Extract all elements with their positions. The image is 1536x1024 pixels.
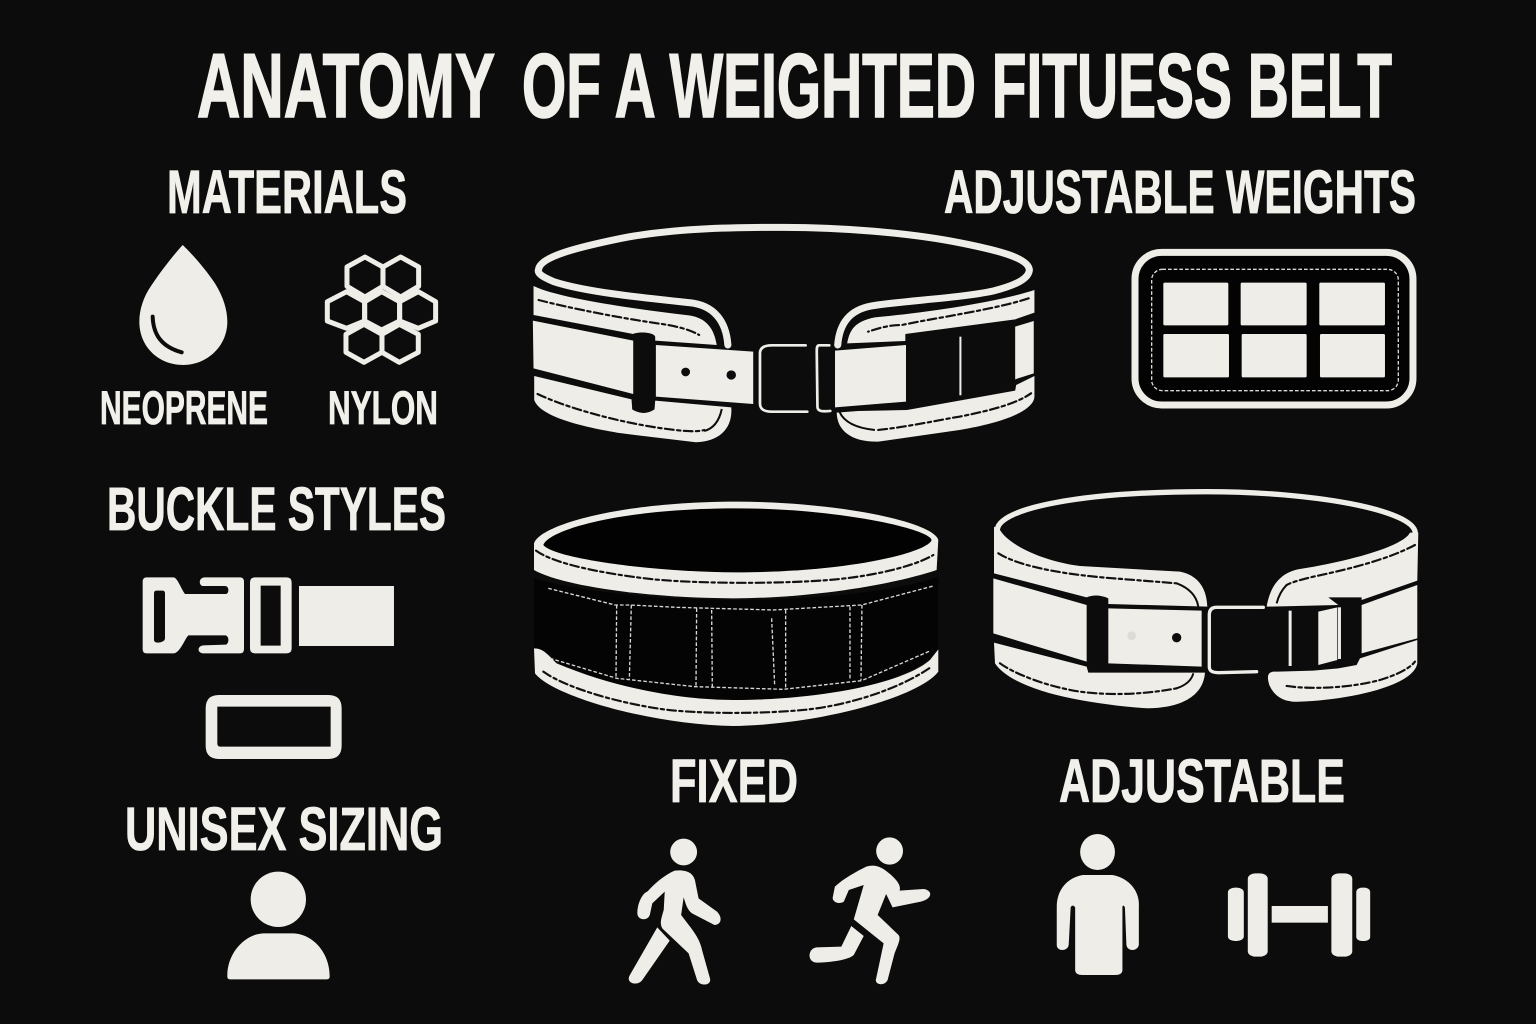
left upper strap xyxy=(534,286,717,345)
rim xyxy=(997,492,1415,533)
heading: materials: MATERIALS xyxy=(167,158,407,226)
right upper strap xyxy=(1267,533,1418,607)
illustration: open belt top xyxy=(533,227,1034,442)
right upper strap xyxy=(847,290,1034,343)
side-release clip xyxy=(143,577,244,653)
right lower strap xyxy=(837,376,1034,442)
upper rim xyxy=(534,502,938,598)
white stitching xyxy=(548,586,933,689)
slide ring xyxy=(250,577,292,653)
icon: buckle set xyxy=(143,577,394,759)
right mid band xyxy=(1362,585,1417,653)
tongue with hole xyxy=(1108,608,1202,667)
icon: neoprene drop xyxy=(139,245,227,365)
lower rim xyxy=(534,648,938,726)
heading: buckle styles: BUCKLE STYLES xyxy=(107,475,446,543)
outer frame xyxy=(1135,252,1413,405)
rim xyxy=(538,227,1029,345)
right tongue xyxy=(835,345,906,407)
slider and keeper xyxy=(1318,607,1337,665)
label: nylon: NYLON xyxy=(328,381,438,434)
buckle frame xyxy=(760,345,807,412)
label: adjustable: ADJUSTABLE xyxy=(1059,747,1345,815)
icon: unisex person xyxy=(227,872,330,979)
strap slit xyxy=(959,337,961,395)
right lower strap xyxy=(1268,640,1417,702)
icon: standing person xyxy=(1057,834,1139,975)
left upper strap xyxy=(994,527,1207,607)
illustration: adjustable belt xyxy=(993,492,1418,708)
stitching xyxy=(1152,269,1398,391)
weight cells xyxy=(1163,283,1385,377)
left lower strap xyxy=(994,643,1205,708)
left lower strap xyxy=(534,376,731,442)
title: ANATOMY xyxy=(197,36,495,137)
rectangular ring xyxy=(206,695,342,759)
buckle frame xyxy=(1209,607,1263,673)
label: fixed: FIXED xyxy=(670,747,798,815)
illustration: fixed belt xyxy=(534,502,938,726)
tongue with holes xyxy=(656,345,753,404)
icon: walking person xyxy=(629,839,721,985)
icon: dumbbell xyxy=(1228,873,1370,957)
left mid band xyxy=(993,578,1087,662)
title xyxy=(197,36,1392,137)
icon: nylon honeycomb xyxy=(327,257,436,362)
plate xyxy=(299,586,394,646)
dark padded band xyxy=(534,577,938,701)
heading: unisex sizing: UNISEX SIZING xyxy=(125,795,443,863)
illustration: weight pack xyxy=(1135,252,1413,405)
label: neoprene: NEOPRENE xyxy=(100,381,268,434)
icon: running person xyxy=(810,837,930,984)
left mid band xyxy=(533,321,633,394)
right end piece xyxy=(1015,321,1034,379)
